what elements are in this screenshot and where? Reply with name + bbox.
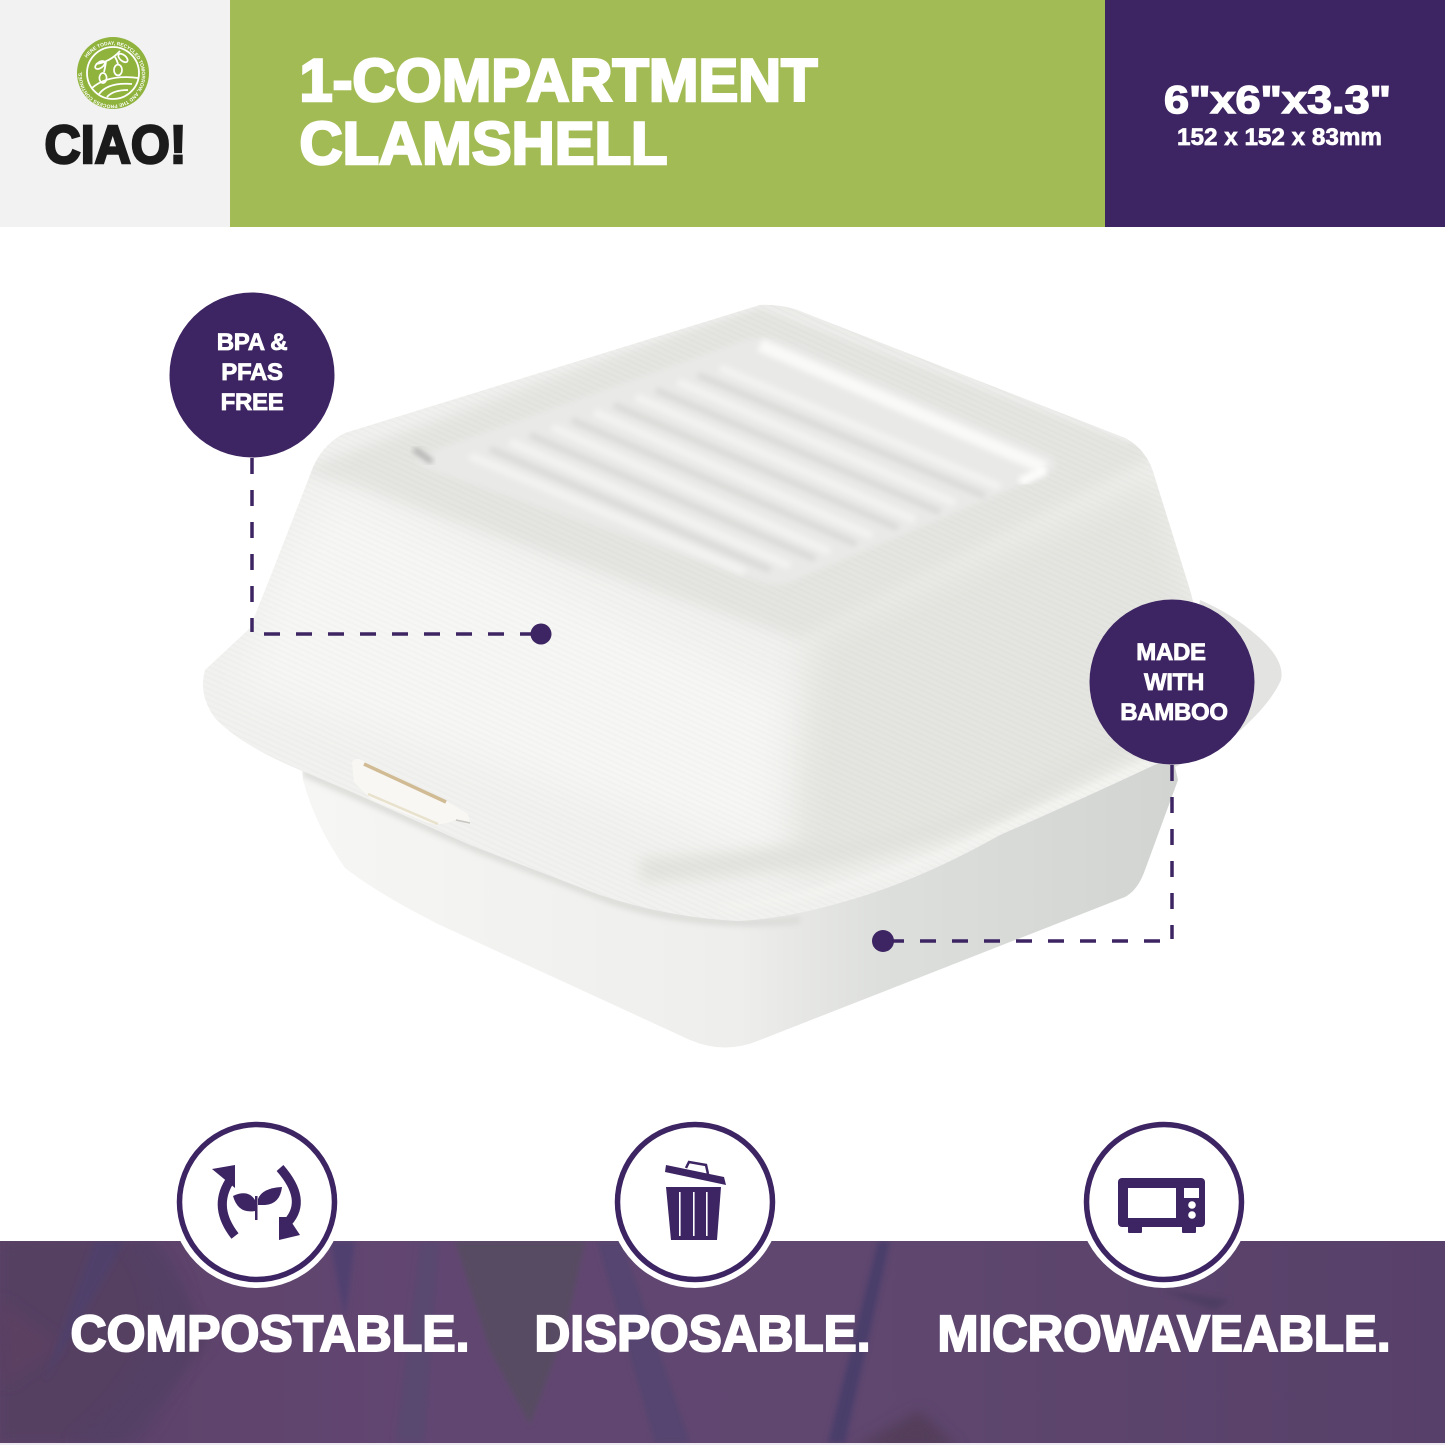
dimensions in inches: 6"x6"x3.3" [1164, 79, 1391, 122]
header: title panel [230, 0, 1105, 227]
callout badge [1090, 600, 1254, 764]
badge: microwaveable [1078, 1116, 1250, 1288]
lid latch tab [352, 759, 470, 824]
icon: leaf with recycling arrows [212, 1165, 300, 1240]
dimensions in millimetres: 152 x 152 x 83mm [1177, 124, 1382, 151]
callout badge: BAMBOO [1120, 699, 1228, 726]
icon: microwave oven [1118, 1178, 1205, 1233]
callout badge: WITH [1144, 669, 1204, 696]
callout: made with bamboo [872, 600, 1254, 952]
bottom band with leaf background [0, 1241, 1445, 1445]
icon: circular olive branch seal: HERE TODAY, RECYCLED TOMORROW, AND THE PROCESS CONTINUES. [78, 41, 146, 108]
badge: compostable [171, 1116, 343, 1288]
callout badge: PFAS [221, 359, 283, 386]
callout badge: BPA & [217, 329, 287, 356]
title line 2: CLAMSHELL [300, 110, 668, 177]
badge: disposable [609, 1116, 781, 1288]
label: compostable: COMPOSTABLE. [70, 1305, 470, 1362]
container base [300, 745, 1178, 1048]
icon: trash can [665, 1162, 726, 1240]
callout badge: MADE [1136, 639, 1206, 666]
callout: BPA and PFAS free [170, 292, 552, 644]
callout badge: FREE [221, 389, 284, 416]
callout leader line [872, 765, 1172, 952]
header: dimensions panel [1105, 0, 1445, 227]
callout leader line [252, 458, 552, 644]
title line 1: 1-COMPARTMENT [300, 47, 818, 114]
logo wordmark: CIAO! [44, 115, 186, 175]
callout badge [170, 292, 334, 458]
container hinge [1170, 600, 1282, 770]
product photo: clamshell container [200, 300, 1282, 1048]
container lid [200, 300, 1240, 930]
lid recess with ribs [414, 338, 1056, 585]
label: disposable: DISPOSABLE. [534, 1305, 870, 1362]
label: microwaveable: MICROWAVEABLE. [938, 1305, 1390, 1362]
header: logo panel [0, 0, 230, 227]
